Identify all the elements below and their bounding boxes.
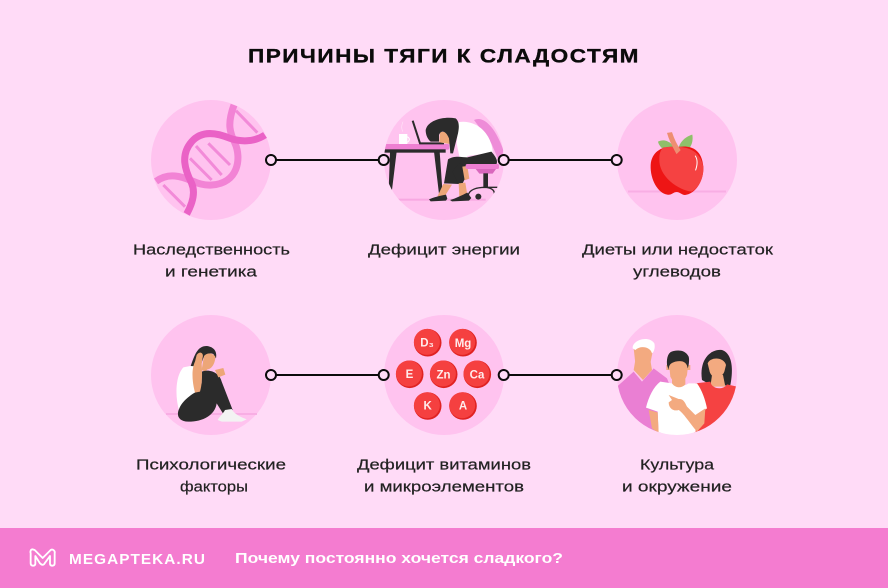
icon: vitamin pills <box>384 315 504 435</box>
panel: energy deficit <box>368 100 520 258</box>
logo text: MEGAPTEKA.RU <box>69 552 206 568</box>
label: diets: Диеты или недостаток <box>582 241 774 258</box>
label: psychological: факторы <box>180 478 248 495</box>
icon: vitamin pills: Zn <box>436 370 451 382</box>
icon: logo <box>30 549 55 566</box>
connector: top right <box>499 155 622 165</box>
panel: diets <box>582 100 774 280</box>
icon: vitamin pills: E <box>406 369 414 381</box>
label: energy deficit: Дефицит энергии <box>368 241 520 258</box>
panel: heredity and genetics <box>133 100 290 280</box>
footer question: Почему постоянно хочется сладкого? <box>235 550 563 567</box>
icon: vitamin pills: Mg <box>455 338 471 350</box>
icon: vitamin pills: K <box>424 400 433 412</box>
panel: vitamins and minerals <box>357 315 531 495</box>
icon: vitamin pills: D₃ <box>420 338 434 350</box>
label: diets <box>582 241 774 280</box>
label: vitamins: и микроэлементов <box>364 478 524 495</box>
footer bar <box>0 528 888 588</box>
label: culture: и окружение <box>622 478 732 495</box>
icon: anxious woman sitting <box>151 315 271 435</box>
label: heredity: и генетика <box>165 263 258 280</box>
label: psychological <box>136 456 286 495</box>
icon: tired woman at desk <box>384 100 504 220</box>
label: diets: углеводов <box>633 263 721 280</box>
panel: culture and environment <box>617 315 737 495</box>
title: ПРИЧИНЫ ТЯГИ К СЛАДОСТЯМ <box>248 46 640 68</box>
label: vitamins: Дефицит витаминов <box>357 456 531 473</box>
label: psychological: Психологические <box>136 456 286 473</box>
connector: top left <box>266 155 389 165</box>
label: vitamins <box>357 456 531 495</box>
panel: psychological factors <box>136 315 286 495</box>
icon: vitamin pills: Ca <box>470 370 485 382</box>
connector: bottom left <box>266 370 389 380</box>
label: culture: Культура <box>640 456 715 473</box>
connector: bottom right <box>499 370 622 380</box>
icon: three people <box>617 315 737 435</box>
label: culture <box>622 456 732 495</box>
icon: red apple <box>617 100 737 220</box>
label: heredity <box>133 241 290 280</box>
icon: DNA circle <box>151 100 271 220</box>
icon: vitamin pills: A <box>459 400 467 412</box>
label: heredity: Наследственность <box>133 241 290 258</box>
